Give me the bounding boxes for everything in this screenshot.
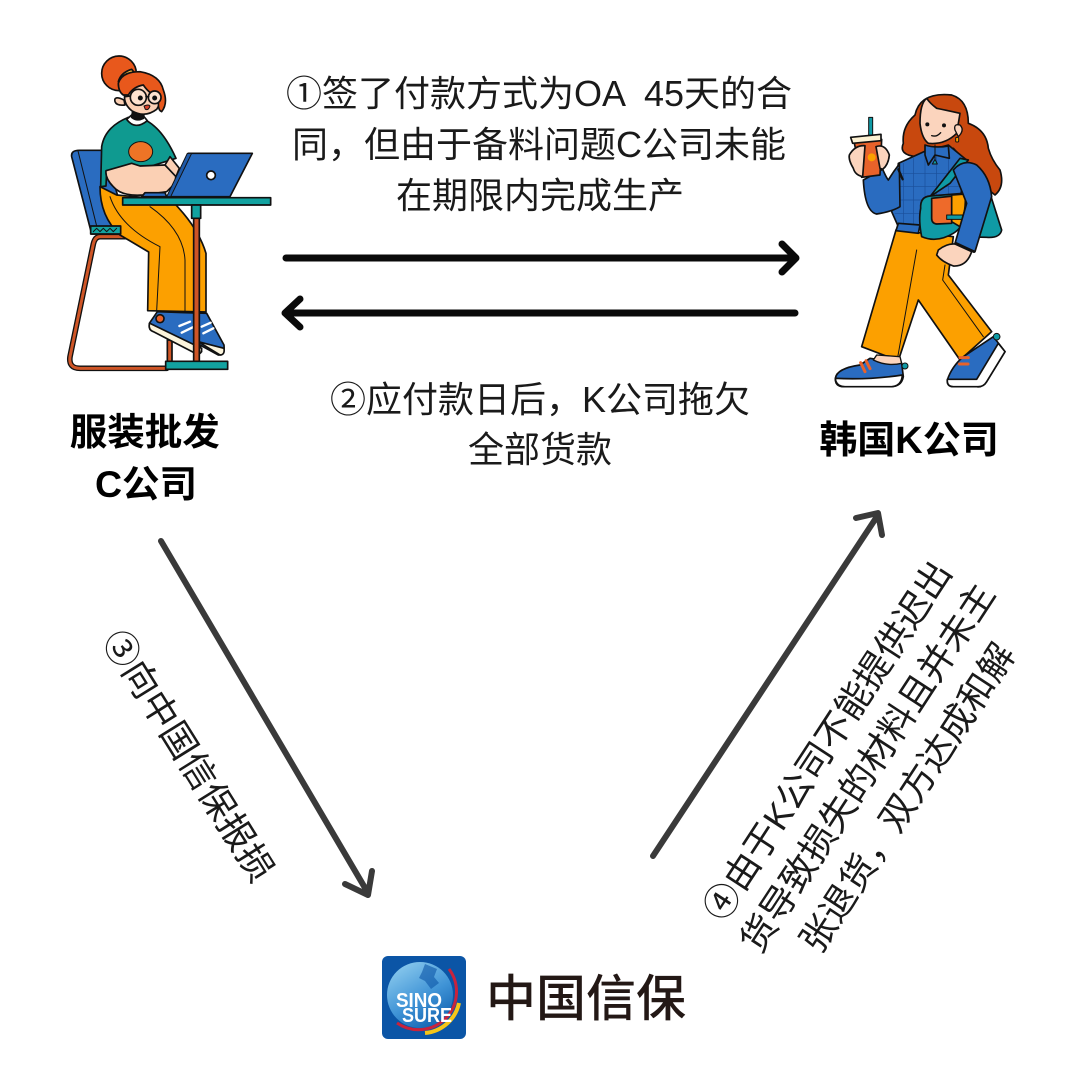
icon: woman working on laptop (C company): [70, 56, 271, 369]
text: step 1 contract description: ①签了付款方式为OA 45天的合: [286, 73, 792, 114]
text: step 4 explanation: ④由于K公司不能提供迟出: [695, 554, 960, 928]
label: C company: C公司: [95, 463, 197, 505]
logo: Sinosure emblem: [382, 956, 466, 1039]
text: step 4 explanation: 货导致损失的材料且并未主: [732, 576, 1003, 960]
text: step 2 overdue payment: 全部货款: [468, 429, 612, 470]
logo: Sinosure emblem: SINO: [396, 990, 442, 1012]
arrow: C company to K company: [286, 244, 796, 272]
text: step 1 contract description: 同，但由于备料问题C公司未能: [292, 124, 786, 165]
logo: Sinosure emblem: SURE: [402, 1005, 452, 1027]
label: K company: 韩国K公司: [819, 420, 999, 462]
icon: woman walking with drink and bag (K company): [835, 95, 1005, 387]
label: C company: 服装批发: [70, 411, 220, 453]
arrow: K company to C company: [285, 299, 795, 327]
text: step 4 explanation: 张退货，双方达成和解: [792, 636, 1023, 960]
logo: Sinosure wordmark: 中国信保: [486, 971, 686, 1027]
text: step 3 report to Sinosure: ③向中国信保报损: [95, 623, 282, 889]
text: step 1 contract description: 在期限内完成生产: [396, 175, 684, 216]
text: step 2 overdue payment: ②应付款日后，K公司拖欠: [330, 379, 750, 420]
arrow: Sinosure to K company: [653, 513, 882, 856]
arrow: C company to Sinosure: [161, 541, 372, 895]
